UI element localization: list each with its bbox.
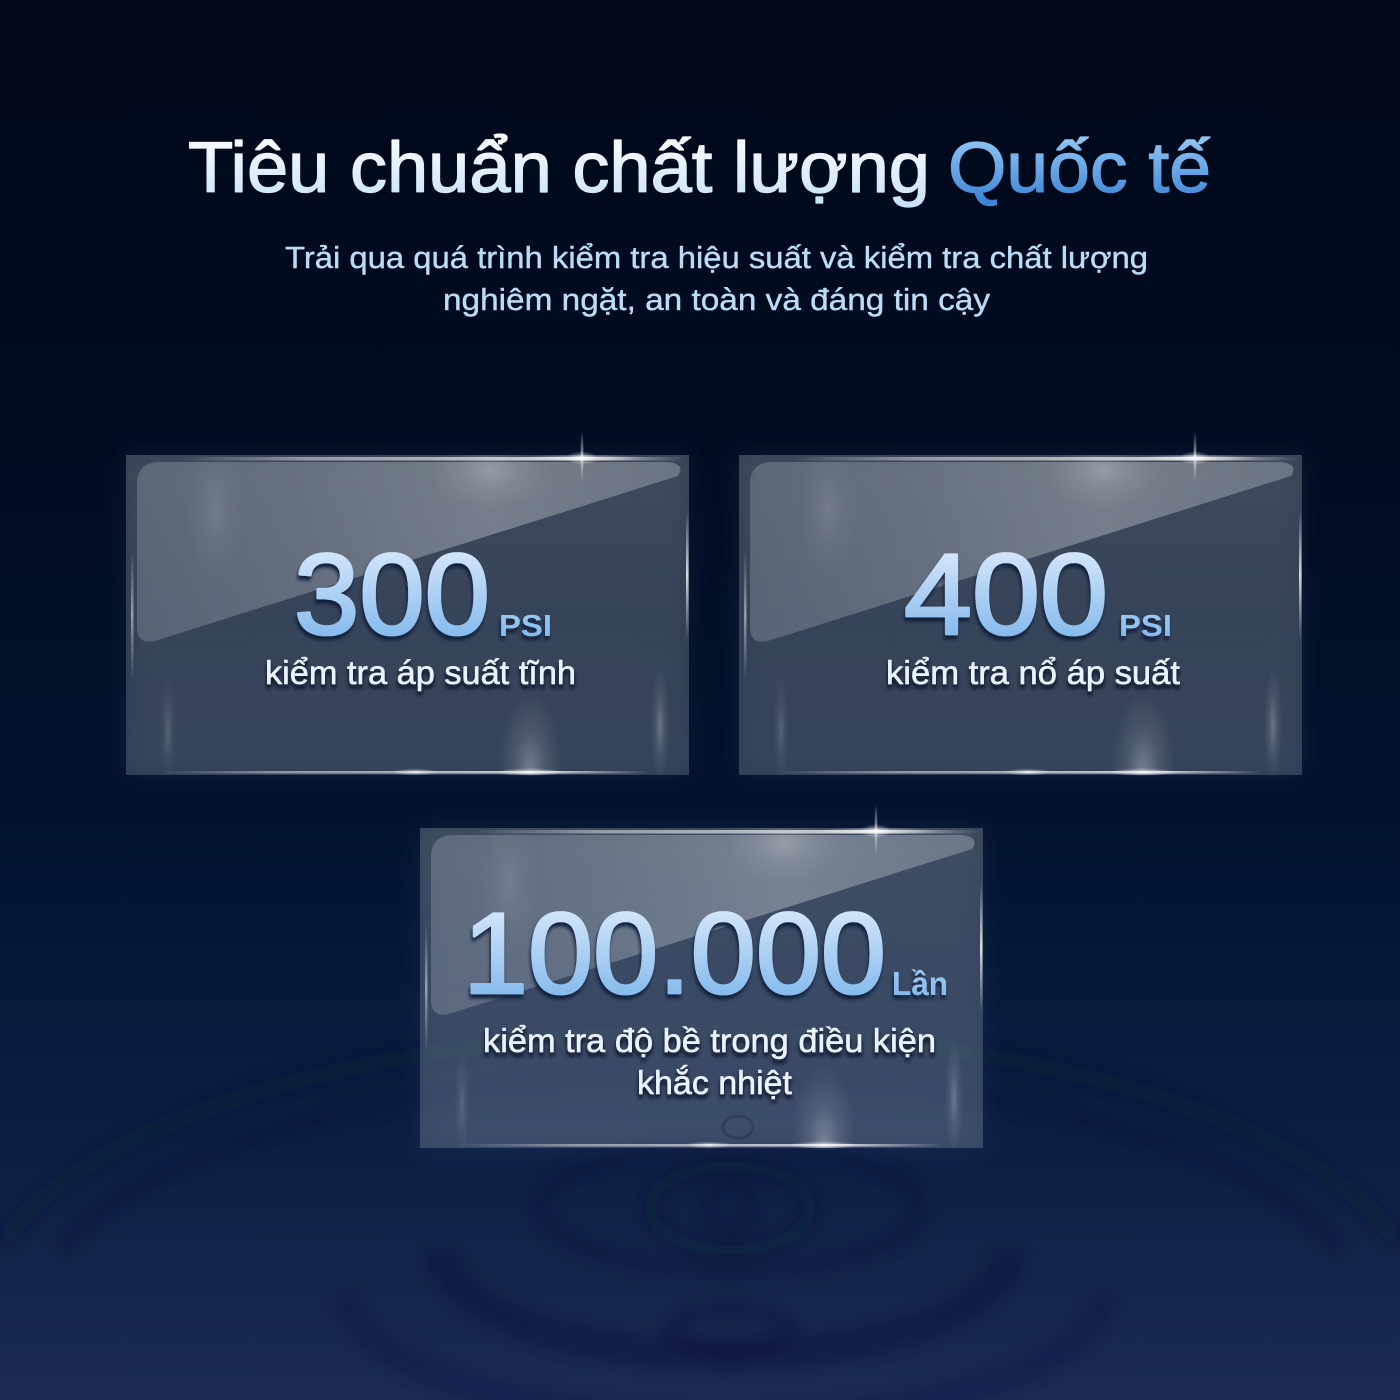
value: 400 [904,531,1108,659]
flare [814,803,938,855]
label: kiểm tra độ bề trong điều kiện [483,1022,936,1059]
card: 400 PSI [739,432,1302,776]
glass panel [126,455,689,775]
edge lights [131,457,688,776]
value: 300 [294,531,490,659]
light streaks [160,430,669,852]
subtitle: Trải qua quá trình kiểm tra hiệu suất và kiểm tra chất lượng [285,240,1148,275]
card: 100.000 Lần [420,804,983,1149]
glass gloss [431,835,974,1015]
light streaks [776,455,1280,775]
light streaks [458,828,960,1148]
unit: PSI [499,608,552,643]
glass gloss [750,462,1293,642]
water ripples [4,1033,1396,1400]
label: khắc nhiệt [637,1064,792,1101]
label: kiểm tra nổ áp suất [886,654,1180,691]
unit: PSI [1119,608,1172,643]
value: 100.000 [463,890,886,1018]
label: kiểm tra áp suất tĩnh [265,654,576,691]
subtitle [285,240,1148,317]
ripple seen through glass [723,1116,753,1138]
title: Tiêu chuẩn chất lượng [188,129,930,208]
flare [1133,430,1257,482]
label [483,1022,936,1101]
glass panel [739,455,1302,775]
card: 300 PSI [126,432,689,776]
subtitle: nghiêm ngặt, an toàn và đáng tin cậy [443,282,991,317]
flare [520,430,644,482]
glass gloss [137,462,680,642]
edge lights [425,830,982,1149]
unit: Lần [892,965,948,1002]
glass panel [420,828,983,1148]
edge lights [744,457,1302,776]
title [188,129,1211,208]
title: Quốc tế [948,129,1211,208]
